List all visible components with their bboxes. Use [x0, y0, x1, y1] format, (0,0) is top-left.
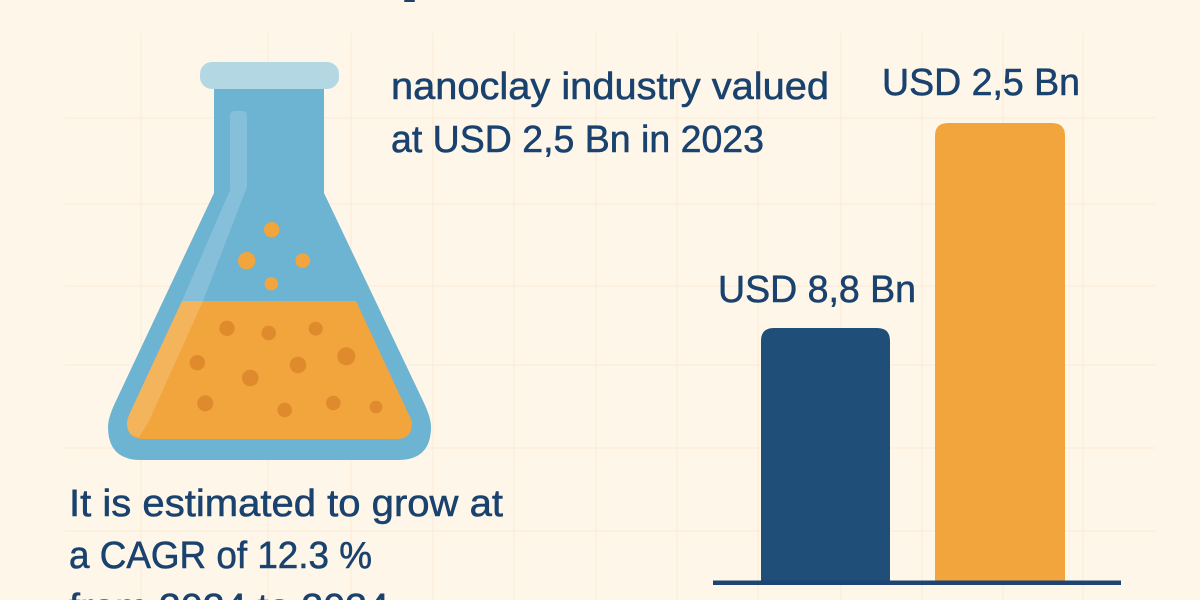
bar: 2034 orange: [935, 123, 1065, 581]
bar: 2023 navy: [761, 328, 890, 585]
flask cap: [200, 62, 339, 89]
liquid: [127, 301, 412, 439]
clipped title descender: [404, 0, 415, 2]
flask glass body: [108, 85, 431, 460]
bubbles above liquid: [238, 222, 310, 290]
text: industry value: nanoclay industry valued: [391, 66, 829, 108]
particles in liquid: [190, 321, 382, 417]
label: USD 2,5 Bn: USD 2,5 Bn: [882, 62, 1080, 104]
text: industry value: [391, 66, 829, 161]
text: growth estimate: It is estimated to grow at: [69, 483, 503, 525]
text: industry value: at USD 2,5 Bn in 2023: [391, 119, 764, 161]
chart baseline: [713, 580, 1121, 585]
text: growth estimate: a CAGR of 12.3 %: [69, 535, 372, 577]
icon: flask: [108, 62, 431, 460]
text: growth estimate: [69, 483, 503, 600]
glass highlight: [127, 111, 247, 437]
label: USD 8,8 Bn: USD 8,8 Bn: [718, 269, 916, 311]
bar chart: [713, 62, 1121, 585]
